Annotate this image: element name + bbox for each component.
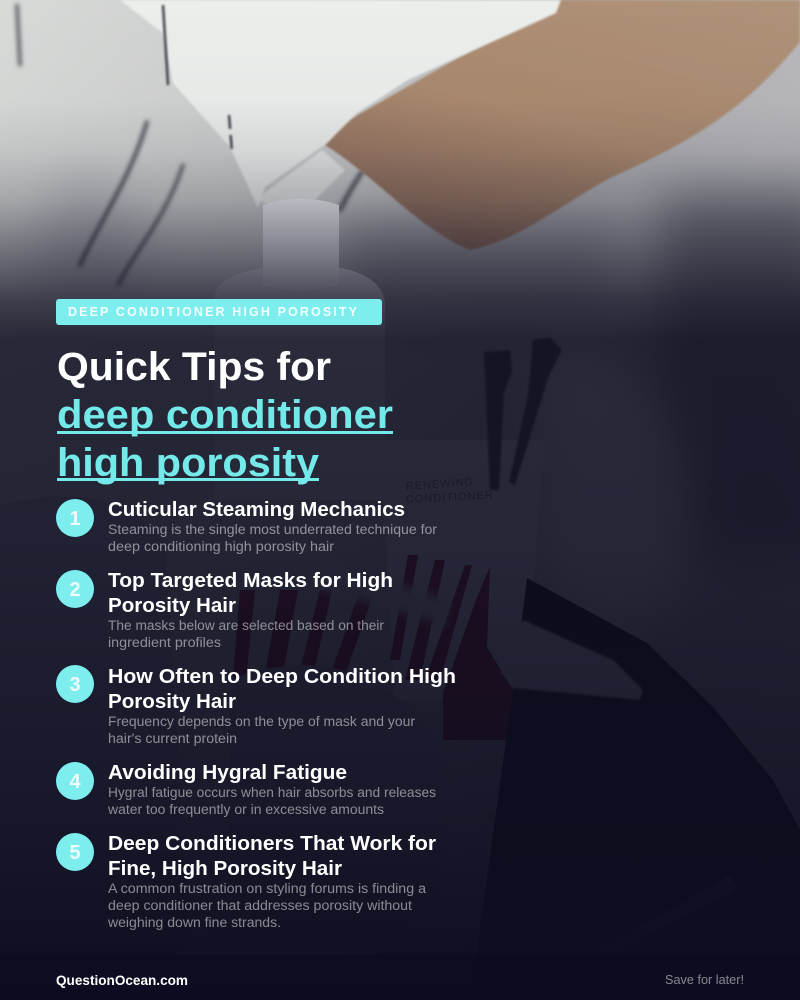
tip 5 description: A common frustration on styling forums is finding a xyxy=(108,881,427,896)
tip 5 description: deep conditioner that addresses porosity without xyxy=(108,898,412,913)
tip 3 heading: How Often to Deep Condition High xyxy=(108,666,456,688)
tip 3 number: 3 xyxy=(69,674,81,696)
tip 5 number xyxy=(56,833,94,871)
title xyxy=(57,345,393,485)
tip 5 heading: Deep Conditioners That Work for xyxy=(108,833,436,855)
tip 5 number: 5 xyxy=(69,842,81,864)
tip 1 heading: Cuticular Steaming Mechanics xyxy=(108,499,405,521)
tip 3 number xyxy=(56,665,94,703)
tip 4 number: 4 xyxy=(69,771,81,793)
tip 2 heading xyxy=(108,570,393,617)
tip 2 number xyxy=(56,570,94,608)
tip 2 number: 2 xyxy=(69,579,81,601)
tip 4 description: Hygral fatigue occurs when hair absorbs and releases xyxy=(108,785,436,800)
tip 5 heading: Fine, High Porosity Hair xyxy=(108,858,342,880)
badge: topic label xyxy=(56,299,382,325)
tip 2 heading: Porosity Hair xyxy=(108,595,236,617)
title: deep conditioner xyxy=(57,393,393,437)
tip 2 description: The masks below are selected based on their xyxy=(108,618,385,633)
tip 1 number xyxy=(56,499,94,537)
tip 3 heading xyxy=(108,666,456,713)
tip 5 xyxy=(56,833,436,930)
tip 1 description xyxy=(108,522,438,554)
tip 3 description: hair's current protein xyxy=(108,731,237,746)
tip 4 description xyxy=(107,785,436,817)
footer save prompt: Save for later! xyxy=(665,972,744,987)
tip 4 description: water too frequently or in excessive amounts xyxy=(107,802,384,817)
tip 4 number xyxy=(56,762,94,800)
tip 3 xyxy=(56,665,456,746)
background photo: conditioner bottles, comb and arm: CONDITIONER xyxy=(406,489,494,506)
background photo: conditioner bottles, comb and arm: RENEWING xyxy=(405,476,475,493)
tip 1 description: deep conditioning high porosity hair xyxy=(108,539,335,554)
tip 5 heading xyxy=(108,833,436,880)
tip 2 description: ingredient profiles xyxy=(108,635,221,650)
tip 3 description: Frequency depends on the type of mask and your xyxy=(108,714,416,729)
tip 4 xyxy=(56,762,436,817)
tip 2 xyxy=(56,570,393,650)
tip 3 heading: Porosity Hair xyxy=(108,691,236,713)
title: Quick Tips for xyxy=(57,345,331,389)
tip 5 description: weighing down fine strands. xyxy=(107,915,281,930)
tip 1 xyxy=(56,499,438,554)
tip 2 description xyxy=(108,618,385,650)
title: high porosity xyxy=(57,441,320,485)
tip 1 description: Steaming is the single most underrated technique for xyxy=(108,522,438,537)
footer site name: QuestionOcean.com xyxy=(56,972,188,988)
tip 5 description xyxy=(107,881,427,930)
tip 4 heading: Avoiding Hygral Fatigue xyxy=(108,762,347,784)
badge: topic label: DEEP CONDITIONER HIGH POROSITY xyxy=(68,305,358,319)
tip 3 description xyxy=(108,714,416,746)
tip 1 number: 1 xyxy=(69,508,81,530)
tip 2 heading: Top Targeted Masks for High xyxy=(108,570,393,592)
